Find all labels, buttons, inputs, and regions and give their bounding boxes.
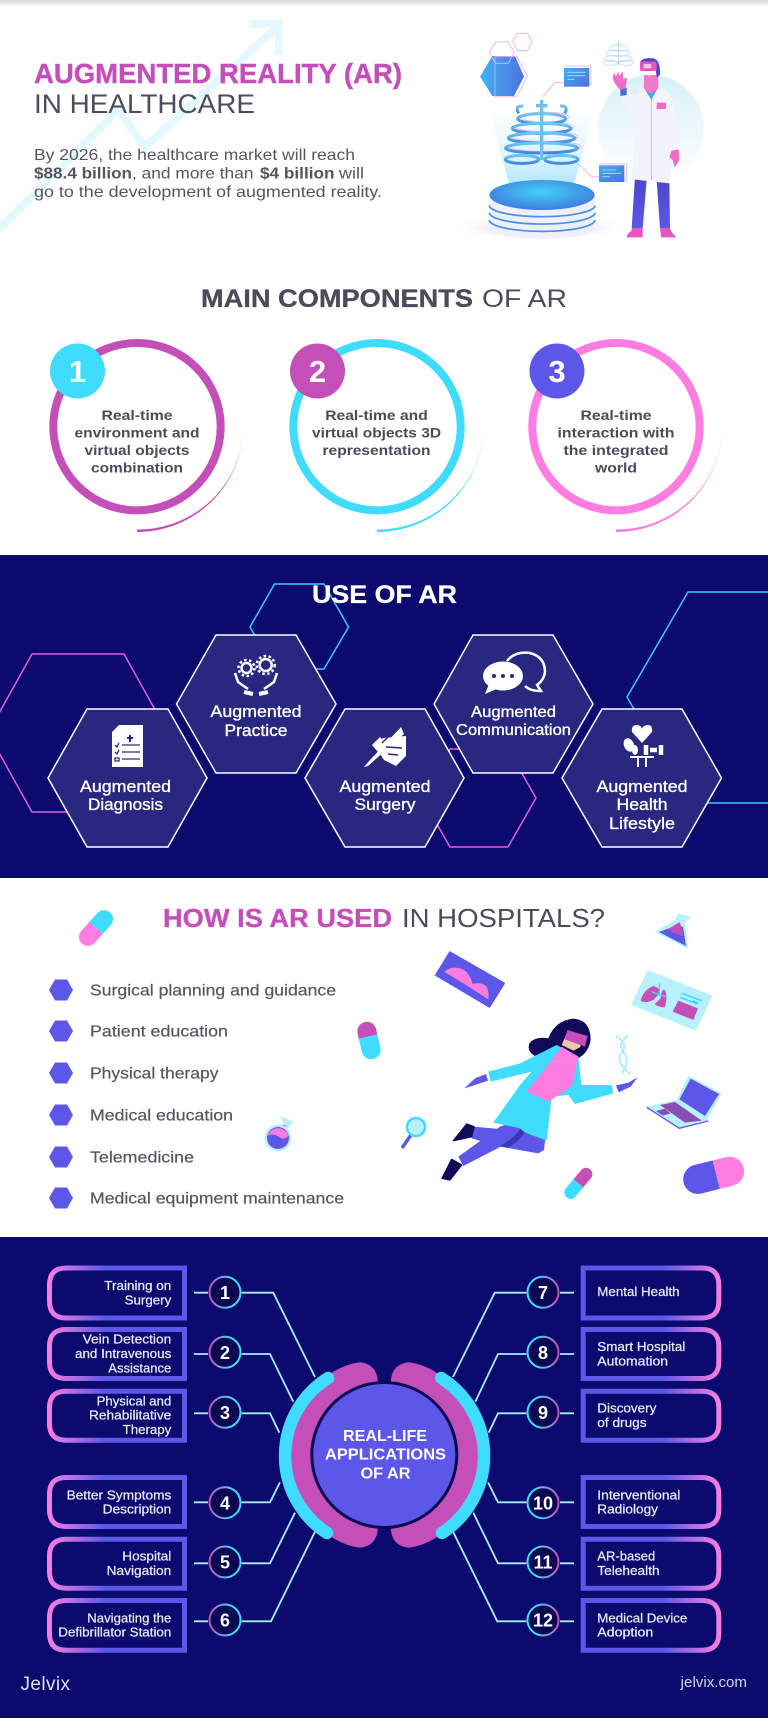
- bullet list: Surgical planning and guidance: [90, 982, 336, 1000]
- bullet list: [49, 980, 344, 1208]
- intro text: By 2026, the healthcare market will reach: [34, 147, 355, 164]
- laptop: [647, 1076, 722, 1128]
- right item 7: 7: [538, 1283, 548, 1303]
- left item 5: 5: [220, 1553, 230, 1573]
- intro text: $4 billion: [260, 166, 334, 182]
- left item 3: Rehabilitative: [89, 1408, 171, 1423]
- intro text: will: [338, 166, 364, 182]
- illustration: doctor with AR rib cage hologram: [452, 33, 704, 241]
- component 2: representation: [322, 442, 430, 458]
- hexagon: augmented health lifestyle: Health: [616, 795, 668, 814]
- left item 6: Navigating the: [87, 1611, 171, 1626]
- intro text: $88.4 billion: [34, 166, 132, 182]
- hexagon: augmented diagnosis: Augmented: [80, 777, 171, 796]
- hexagon: augmented communication: Augmented: [471, 704, 556, 721]
- right item 11: 11: [533, 1553, 553, 1573]
- component 2: [290, 343, 483, 532]
- intro text: , and more than: [132, 166, 254, 182]
- top shadow strip: [0, 0, 768, 7]
- hub: central circle: REAL-LIFE: [343, 1428, 427, 1445]
- section: main components: [50, 285, 722, 532]
- bullet list: Medical equipment maintenance: [90, 1190, 344, 1208]
- left item 3: [50, 1391, 240, 1440]
- hexagon: augmented practice: Practice: [224, 721, 288, 740]
- right item 10: Radiology: [597, 1502, 659, 1517]
- woman figure: [442, 1019, 638, 1180]
- hexagon: augmented health lifestyle: Augmented: [596, 777, 688, 796]
- left item 3: Therapy: [123, 1422, 172, 1437]
- left item 2: Assistance: [108, 1360, 171, 1375]
- hub: central circle: APPLICATIONS: [325, 1447, 446, 1464]
- section: how is AR used in hospitals: [49, 903, 747, 1208]
- component 1: virtual objects: [84, 442, 190, 458]
- bullet list: Medical education: [90, 1108, 233, 1124]
- footer url: jelvix.com: [680, 1674, 747, 1691]
- right item 8: 8: [538, 1343, 548, 1363]
- right item 12: Medical Device: [597, 1610, 687, 1625]
- illustration: floating woman with VR headset and medical items: [436, 952, 747, 1201]
- right item 8: Smart Hospital: [597, 1339, 685, 1354]
- left item 2: Vein Detection: [83, 1332, 171, 1347]
- bullet list: Telemedicine: [90, 1150, 194, 1166]
- component 2: 2: [309, 354, 326, 389]
- right item 10: 10: [533, 1493, 553, 1513]
- right item 9: 9: [538, 1403, 548, 1423]
- component 1: [50, 343, 243, 532]
- connector lines: [194, 1293, 574, 1621]
- heading: MAIN COMPONENTS: [201, 285, 473, 313]
- hexagon: augmented surgery: [305, 709, 464, 847]
- icon: triangular flask: [655, 913, 691, 949]
- component 3: world: [594, 460, 637, 476]
- component 1: Real-time: [102, 407, 173, 423]
- left item 3: 3: [220, 1403, 230, 1423]
- component 1: 1: [69, 354, 86, 389]
- component 2: virtual objects 3D: [312, 424, 441, 440]
- left item 3: Physical and: [97, 1393, 171, 1408]
- left item 4: Description: [103, 1502, 171, 1517]
- left item 5: [50, 1539, 240, 1588]
- panel: use of AR: [0, 555, 768, 878]
- left item 4: 4: [220, 1493, 230, 1513]
- left item 1: [50, 1268, 240, 1318]
- component 2: Real-time and: [325, 407, 428, 423]
- right item 12: Adoption: [597, 1625, 653, 1640]
- component 3: [530, 343, 722, 532]
- hexagon: augmented diagnosis: [48, 709, 207, 847]
- hexagon: augmented health lifestyle: Lifestyle: [609, 814, 675, 833]
- right item 12: [528, 1600, 719, 1650]
- hexagon: augmented practice: [176, 635, 336, 773]
- left item 6: Defibrillator Station: [58, 1624, 171, 1639]
- intro text: [34, 147, 382, 201]
- component 1: combination: [91, 460, 183, 476]
- heading: OF AR: [482, 285, 567, 313]
- component 1: environment and: [74, 424, 200, 440]
- hub: central circle: [285, 1362, 484, 1548]
- lungs card: [631, 970, 713, 1031]
- left item 2: 2: [220, 1343, 230, 1363]
- right item 8: [528, 1330, 719, 1378]
- header panel: [0, 24, 704, 241]
- right item 11: [528, 1539, 719, 1588]
- graph card: [436, 952, 504, 1007]
- hub: central circle: OF AR: [360, 1465, 411, 1482]
- right item 10: [528, 1478, 719, 1526]
- left item 1: 1: [220, 1283, 230, 1303]
- component 3: interaction with: [558, 424, 674, 440]
- component 3: the integrated: [564, 442, 668, 458]
- heading: HOW IS AR USED: [163, 903, 392, 933]
- small pill: [562, 1165, 595, 1201]
- left item 2: [50, 1330, 240, 1378]
- heading: [201, 285, 567, 313]
- panel: real-life applications: [0, 1237, 768, 1718]
- DNA strand: [617, 1036, 630, 1074]
- intro text: go to the development of augmented reality.: [34, 184, 382, 201]
- right item 11: AR-based: [597, 1549, 655, 1564]
- heading: IN HOSPITALS?: [402, 903, 605, 933]
- hexagon: augmented communication: Communication: [456, 722, 571, 739]
- icon: magnifier: [402, 1118, 425, 1148]
- title: [34, 58, 402, 119]
- icon: pill top left: [75, 906, 117, 950]
- left item 6: 6: [220, 1611, 230, 1631]
- bullet list: Physical therapy: [90, 1066, 218, 1082]
- icon: round flask: [264, 1118, 292, 1152]
- left item 2: and Intravenous: [75, 1346, 172, 1361]
- right item 7: [528, 1268, 719, 1318]
- footer logo: Jelvix: [20, 1674, 70, 1695]
- large pill: [680, 1154, 747, 1197]
- right item 9: [528, 1391, 719, 1440]
- left item 5: Hospital: [122, 1549, 171, 1564]
- icon: pill middle: [355, 1020, 383, 1061]
- background growth arrow: [0, 24, 279, 230]
- left item 4: Better Symptoms: [67, 1487, 172, 1502]
- right item 10: Interventional: [597, 1487, 680, 1502]
- right item 9: of drugs: [597, 1415, 647, 1430]
- hexagon: augmented diagnosis: Diagnosis: [88, 795, 163, 814]
- left item 6: [50, 1600, 240, 1650]
- hexagon: augmented surgery: Surgery: [354, 795, 416, 814]
- right item 7: Mental Health: [597, 1284, 680, 1299]
- component 3: Real-time: [580, 407, 652, 423]
- left item 4: [50, 1478, 240, 1526]
- hexagon: augmented surgery: Augmented: [340, 777, 430, 796]
- bullet list: Patient education: [90, 1024, 228, 1040]
- left item 1: Training on: [104, 1278, 171, 1293]
- right item 9: Discovery: [597, 1401, 657, 1416]
- hexagon: augmented health lifestyle: [562, 709, 722, 847]
- title: IN HEALTHCARE: [34, 89, 255, 119]
- right item 12: 12: [533, 1611, 553, 1631]
- heading: [163, 903, 605, 933]
- right item 8: Automation: [597, 1353, 668, 1368]
- right item 11: Telehealth: [597, 1563, 660, 1578]
- hexagon: augmented practice: Augmented: [210, 702, 302, 721]
- left item 1: Surgery: [125, 1292, 172, 1307]
- title: AUGMENTED REALITY (AR): [34, 58, 402, 89]
- hexagon: augmented communication: [434, 635, 593, 773]
- left item 5: Navigation: [107, 1563, 171, 1578]
- heading: USE OF AR: [312, 581, 457, 609]
- component 3: 3: [548, 354, 566, 389]
